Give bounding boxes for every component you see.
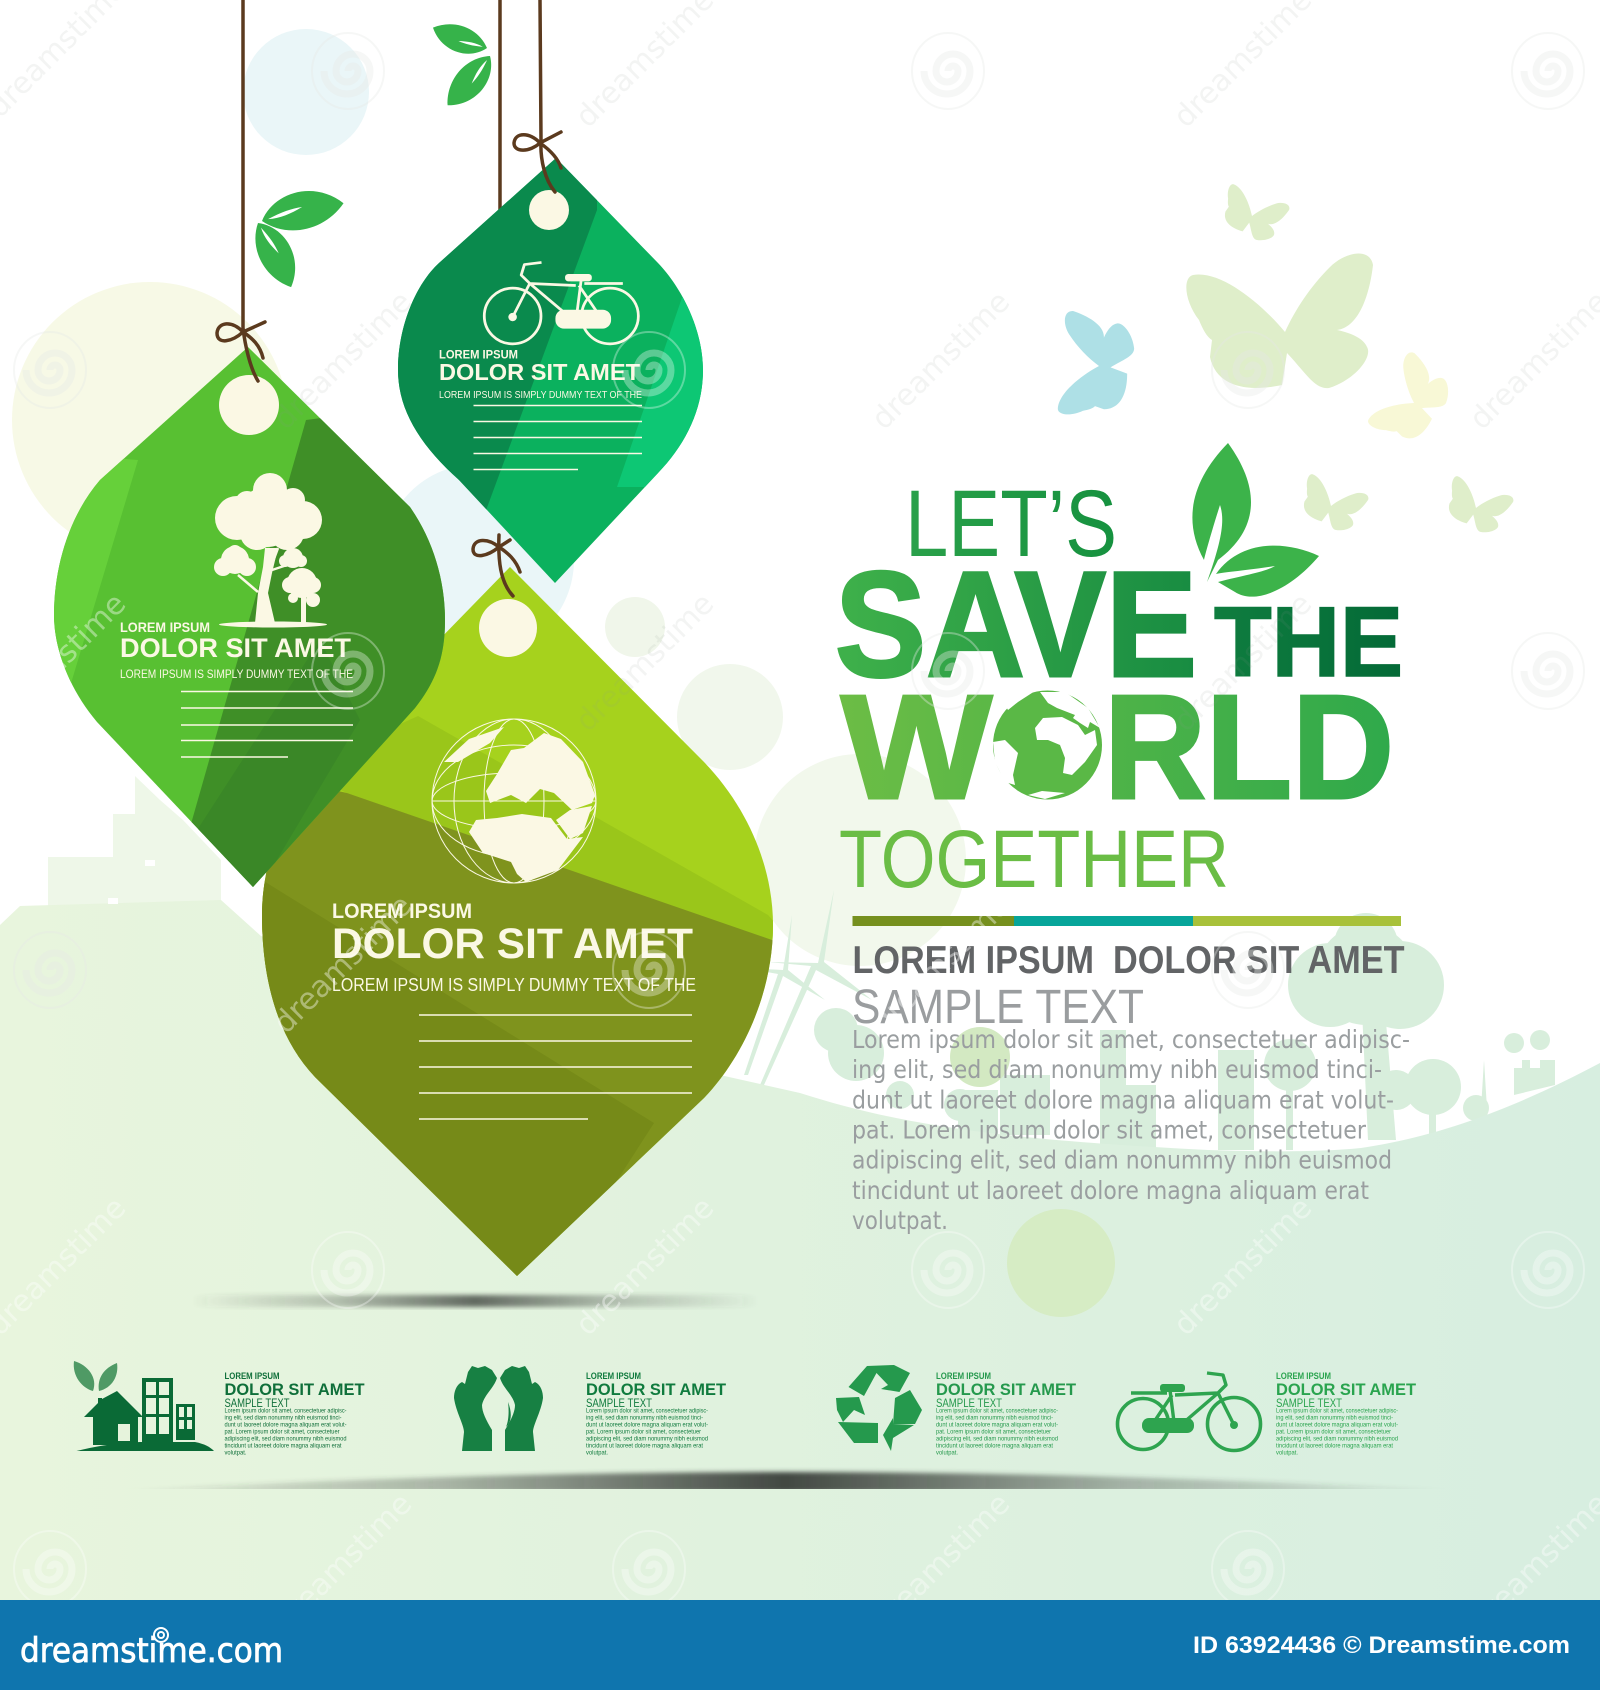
watermark text: dreamstime (569, 586, 721, 739)
strings with bows (217, 0, 561, 596)
heading text: LOREM IPSUM (120, 620, 210, 635)
ruled lines (419, 1015, 692, 1119)
text block: item 3: Lorem ipsum dolor sit amet, consectetuer adipisc- (936, 1408, 1058, 1414)
text block: item 1: volutpat. (224, 1450, 247, 1456)
footer image id: ID 63924436 © Dreamstime.com (1193, 1632, 1570, 1659)
panel: green tag (54, 347, 445, 887)
body paragraph: ing elit, sed diam nonummy nibh euismod tinci- (852, 1055, 1382, 1084)
text block: item 4: adipiscing elit, sed diam nonummy nibh euismod (1276, 1436, 1398, 1442)
text block: item 2: DOLOR SIT AMET (586, 1380, 727, 1399)
accent circle on ground (1007, 1209, 1115, 1317)
watermark text: dreamstime (267, 888, 419, 1041)
title: THE: THE (1214, 586, 1403, 697)
text block: item 4: Lorem ipsum dolor sit amet, consectetuer adipisc- (1276, 1408, 1398, 1414)
city silhouette at left (20, 776, 221, 930)
building window details (108, 860, 155, 904)
heading text: LOREM IPSUM IS SIMPLY DUMMY TEXT OF THE (332, 975, 696, 995)
text block: item 1: tincidunt ut laoreet dolore magna aliquam erat (224, 1442, 342, 1450)
watermark text: dreamstime (267, 1486, 419, 1639)
butterflies (1045, 177, 1515, 539)
text block: item 3: SAMPLE TEXT (936, 1396, 1003, 1410)
ground (0, 900, 1600, 1600)
text block: item 4: ing elit, sed diam nonummy nibh euismod tinci- (1276, 1414, 1393, 1422)
pale green accent circle in skyline (950, 1027, 1010, 1087)
icon: wireframe globe (432, 719, 596, 883)
heading text: DOLOR SIT AMET (439, 359, 640, 385)
heading text: LOREM IPSUM (439, 348, 518, 362)
tag body (398, 159, 703, 583)
watermark text: dreamstime (267, 284, 419, 437)
icon: trees (214, 473, 327, 628)
text block: item 3: pat. Lorem ipsum dolor sit amet, consectetuer (936, 1428, 1052, 1436)
icon: globe in WORLD (993, 690, 1102, 800)
watermark text: dreamstime (569, 1190, 721, 1343)
heading text: DOLOR SIT AMET (120, 633, 351, 663)
text block: item 2: LOREM IPSUM (586, 1371, 641, 1382)
icon: white bicycle (484, 262, 638, 344)
ruled lines (181, 692, 353, 757)
title: WORLD: W (841, 665, 992, 830)
title: TOGETHER: TOGETHER (839, 814, 1229, 905)
watermark text: dreamstime (865, 1486, 1017, 1639)
text block: item 1: dunt ut laoreet dolore magna aliquam erat volut- (224, 1422, 346, 1428)
heading text (332, 900, 696, 995)
text block: item 1: adipiscing elit, sed diam nonummy nibh euismod (224, 1436, 347, 1442)
text block: item 1: LOREM IPSUM (224, 1371, 280, 1382)
subheading: LOREM IPSUM DOLOR SIT AMET (852, 939, 1405, 982)
watermark text: dreamstime (865, 284, 1017, 437)
body paragraph: volutpat. (852, 1206, 948, 1235)
text block: item 3 (936, 1371, 1077, 1456)
title: WORLD: RLD (1104, 665, 1394, 830)
icon: hands holding drop (454, 1366, 543, 1451)
watermark text: dreamstime (865, 888, 1017, 1041)
text block: item 1: SAMPLE TEXT (224, 1396, 290, 1410)
text block: item 1: ing elit, sed diam nonummy nibh euismod tinci- (224, 1414, 342, 1422)
text block: item 2: Lorem ipsum dolor sit amet, consectetuer adipisc- (586, 1408, 708, 1414)
text block: item 1 (224, 1371, 365, 1456)
body paragraph: Lorem ipsum dolor sit amet, consectetuer adipisc- (852, 1025, 1410, 1054)
heading text: LOREM IPSUM IS SIMPLY DUMMY TEXT OF THE (439, 389, 642, 401)
body paragraph: adipiscing elit, sed diam nonummy nibh euismod (852, 1146, 1392, 1174)
footer bar (0, 1600, 1600, 1690)
panel: teal tag (398, 159, 703, 583)
footer logo: dreamstime.com (20, 1631, 283, 1671)
body paragraph: pat. Lorem ipsum dolor sit amet, consectetuer (852, 1116, 1367, 1144)
heading text (439, 348, 642, 401)
text block: item 2 (586, 1371, 727, 1456)
watermark text: dreamstime (1167, 1190, 1319, 1343)
title leaves (1192, 443, 1319, 597)
text block: item 3: tincidunt ut laoreet dolore magna aliquam erat (936, 1442, 1053, 1450)
text block: item 3: volutpat. (936, 1450, 958, 1456)
text block: item 4: tincidunt ut laoreet dolore magna aliquam erat (1276, 1442, 1393, 1450)
text block: item 4: DOLOR SIT AMET (1276, 1380, 1417, 1399)
background circles (12, 29, 966, 966)
text block: item 3: ing elit, sed diam nonummy nibh euismod tinci- (936, 1414, 1053, 1422)
text block: item 1: pat. Lorem ipsum dolor sit amet, consectetuer (224, 1428, 340, 1436)
text block: item 3: adipiscing elit, sed diam nonummy nibh euismod (936, 1436, 1058, 1442)
text block: item 4: LOREM IPSUM (1276, 1371, 1331, 1382)
text block: item 1: Lorem ipsum dolor sit amet, consectetuer adipisc- (224, 1408, 346, 1414)
text block: item 2: pat. Lorem ipsum dolor sit amet, consectetuer (586, 1428, 702, 1436)
shadow under big tag (190, 1295, 760, 1307)
text block: item 4: dunt ut laoreet dolore magna aliquam erat volut- (1276, 1422, 1398, 1428)
text block: item 2: volutpat. (586, 1450, 608, 1456)
decorative leaves on strings (247, 15, 503, 294)
body paragraph (852, 1025, 1410, 1235)
title: WORLD (841, 665, 1394, 830)
text block: item 4: volutpat. (1276, 1450, 1298, 1456)
heading text: DOLOR SIT AMET (332, 920, 693, 968)
body paragraph: tincidunt ut laoreet dolore magna aliquam erat (852, 1176, 1369, 1205)
text block: item 2: ing elit, sed diam nonummy nibh euismod tinci- (586, 1414, 703, 1422)
tri-colour divider bar (852, 916, 1401, 926)
tag holes (219, 190, 569, 657)
title: SAVE: SAVE (835, 540, 1197, 708)
text block: item 4: pat. Lorem ipsum dolor sit amet, consectetuer (1276, 1428, 1392, 1436)
icon: recycling arrows (836, 1365, 922, 1451)
skyline silhouette: trees, turbines, buildings (744, 890, 1555, 1150)
text block: item 4: SAMPLE TEXT (1276, 1396, 1343, 1410)
heading text (120, 620, 353, 681)
body paragraph: dunt ut laoreet dolore magna aliquam erat volut- (852, 1086, 1394, 1114)
heading text: LOREM IPSUM (332, 900, 472, 923)
text block: item 3: LOREM IPSUM (936, 1371, 991, 1382)
footer logo swirl (154, 1628, 168, 1642)
text block: item 2: adipiscing elit, sed diam nonummy nibh euismod (586, 1436, 708, 1442)
text block: item 3: DOLOR SIT AMET (936, 1380, 1077, 1399)
shadow under icon row (107, 1472, 1463, 1492)
tag body (262, 567, 773, 1276)
icon: house and buildings with leaves (74, 1361, 214, 1451)
text block: item 2: SAMPLE TEXT (586, 1396, 653, 1410)
title: LET'S: LET’S (905, 471, 1117, 577)
text block: item 3: dunt ut laoreet dolore magna aliquam erat volut- (936, 1422, 1058, 1428)
watermark text: dreamstime (1167, 586, 1319, 739)
panel: big olive tag (262, 567, 773, 1276)
watermark spirals on white areas (14, 33, 1584, 1008)
string to big tag (behind teal tag) (498, 0, 502, 215)
text block: item 2: dunt ut laoreet dolore magna aliquam erat volut- (586, 1422, 708, 1428)
text block: item 2: tincidunt ut laoreet dolore magna aliquam erat (586, 1442, 703, 1450)
text block: item 4 (1276, 1371, 1417, 1456)
sample text: SAMPLE TEXT (852, 981, 1144, 1034)
heading text: LOREM IPSUM IS SIMPLY DUMMY TEXT OF THE (120, 667, 353, 681)
icon: green bicycle (1118, 1373, 1260, 1450)
text block: item 1: DOLOR SIT AMET (224, 1380, 365, 1399)
ruled lines (474, 406, 642, 470)
tag body (54, 347, 445, 887)
